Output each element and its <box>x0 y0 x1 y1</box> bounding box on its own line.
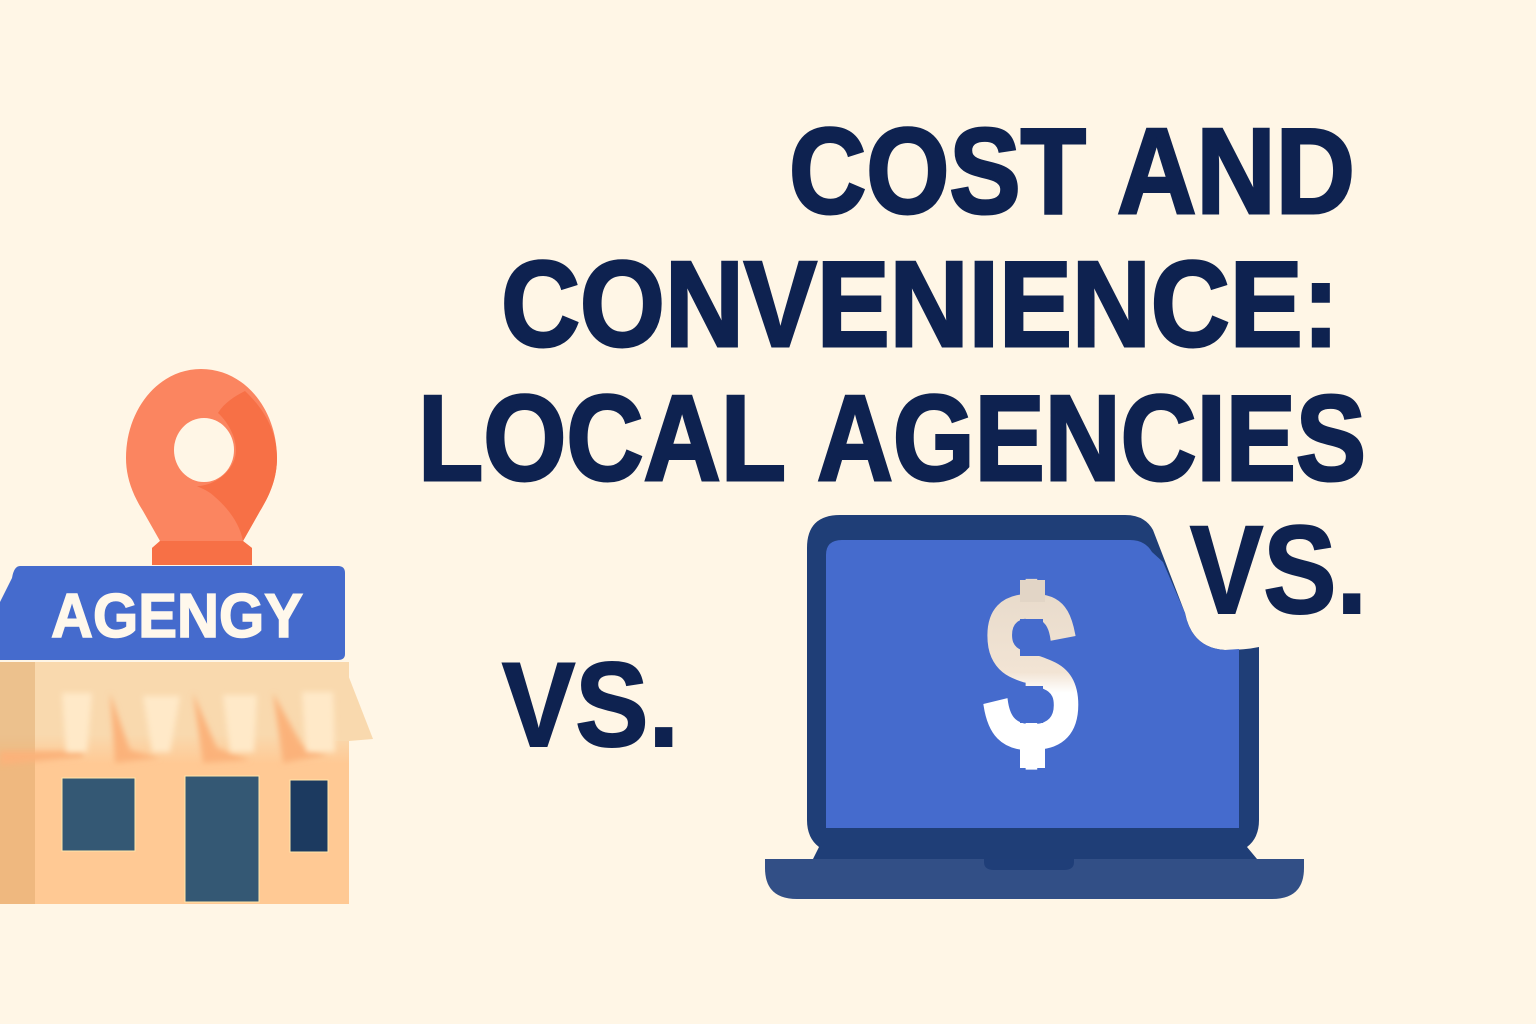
icon: local agency storefront <box>0 369 373 904</box>
label: vs right: VS. <box>1190 501 1367 640</box>
right window <box>290 780 328 852</box>
icon: laptop with dollar sign <box>765 515 1304 899</box>
laptop frame <box>807 515 1259 859</box>
laptop notch <box>984 859 1074 870</box>
title: AND <box>1117 103 1355 239</box>
left window <box>62 778 135 851</box>
label: vs left: VS. <box>502 638 679 772</box>
laptop screen <box>826 540 1239 828</box>
awning highlights <box>62 692 335 752</box>
title: AGENCIES <box>817 370 1366 506</box>
title: COST <box>789 103 1086 239</box>
awning <box>335 662 373 741</box>
title <box>418 103 1366 506</box>
title: LOCAL <box>418 370 786 506</box>
building shadow <box>0 662 35 904</box>
building wall <box>0 662 349 904</box>
location pin <box>126 369 277 565</box>
laptop base <box>765 859 1304 899</box>
dollar sign: $ <box>982 544 1080 801</box>
sign board <box>0 566 345 660</box>
door <box>185 776 259 902</box>
awning stripes <box>0 693 327 765</box>
sign text: AGENGY <box>51 582 303 651</box>
title: CONVENIENCE: <box>501 236 1339 372</box>
